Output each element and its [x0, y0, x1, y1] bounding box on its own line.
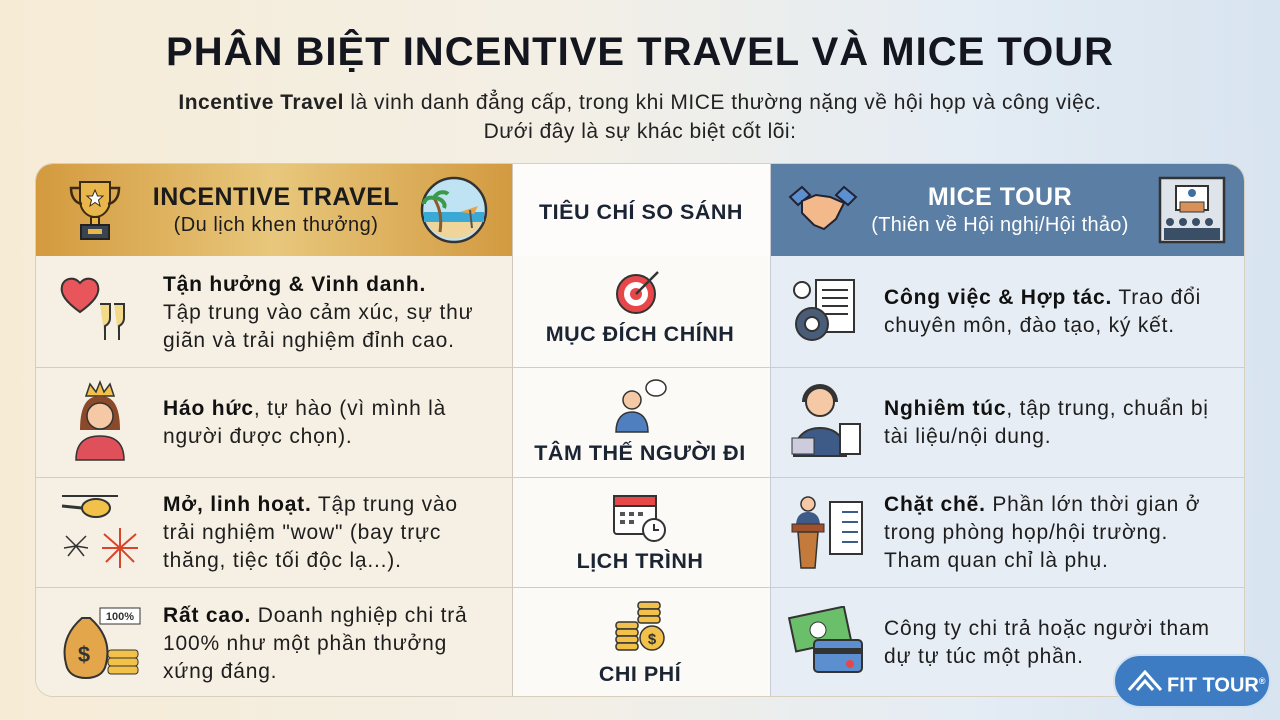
- icon: handshake: [788, 186, 858, 230]
- row 1: purpose: [60, 271, 1201, 352]
- icon: money bag with coins: [64, 608, 140, 679]
- header: mice: (Thiên về Hội nghị/Hội thảo): [871, 214, 1129, 236]
- text: mice mindset: Nghiêm túc, tập trung, chuẩn bị: [884, 397, 1209, 420]
- icon: crowned woman: [75, 380, 125, 461]
- text: mice schedule: [884, 493, 1200, 572]
- text: incentive cost: [163, 604, 468, 683]
- text: mice purpose: Công việc & Hợp tác. Trao đổi: [884, 286, 1201, 309]
- header: criteria: [512, 164, 770, 256]
- icon: heart and glasses: [60, 278, 125, 340]
- text: incentive schedule: Mở, linh hoạt. Tập trung vào: [163, 493, 458, 516]
- icon: coin stacks: [615, 601, 665, 651]
- label: mindset: TÂM THẾ NGƯỜI ĐI: [534, 441, 746, 465]
- text: incentive mindset: người được chọn).: [163, 425, 352, 448]
- icon: money bag with coins: 100%: [106, 611, 134, 623]
- right column bg: [770, 256, 1246, 698]
- label: main purpose: MỤC ĐÍCH CHÍNH: [546, 322, 734, 346]
- icon: conference hall: [1158, 176, 1226, 244]
- header: incentive: (Du lịch khen thưởng): [174, 214, 378, 236]
- icon: helicopter and fireworks: [62, 495, 138, 568]
- text: mice purpose: [884, 286, 1201, 337]
- icon: target: [616, 271, 659, 314]
- icon: person with speech bubble: [615, 379, 667, 433]
- text: mice cost: [884, 617, 1210, 668]
- text: mice schedule: Tham quan chỉ là phụ.: [884, 549, 1109, 572]
- text: mice schedule: trong phòng họp/hội trường.: [884, 521, 1168, 544]
- label: cost: CHI PHÍ: [599, 662, 681, 686]
- header: incentive: [36, 164, 512, 256]
- icon: calendar clock: [613, 495, 666, 542]
- row 2: mindset: [75, 379, 1209, 465]
- text: incentive cost: 100% như một phần thưởng: [163, 632, 447, 655]
- text: incentive mindset: [163, 397, 446, 448]
- icon: cash and card: [788, 606, 863, 673]
- left column bg: [36, 256, 512, 698]
- text: incentive schedule: thăng, tiệc tối độc lạ...).: [163, 549, 402, 572]
- subtitle: [178, 90, 1102, 143]
- header: criteria: TIÊU CHÍ SO SÁNH: [539, 200, 743, 224]
- header: mice: [770, 164, 1246, 256]
- icon: podium and checklist: [792, 496, 863, 569]
- text: mice cost: dự tự túc một phần.: [884, 645, 1084, 668]
- icon: beach: [420, 176, 488, 244]
- row 3: schedule: [62, 493, 1200, 573]
- subtitle: Dưới đây là sự khác biệt cốt lõi:: [484, 120, 796, 143]
- text: incentive schedule: [163, 493, 458, 572]
- text: incentive cost: xứng đáng.: [163, 660, 277, 683]
- text: mice mindset: [884, 397, 1209, 448]
- icon: money bag with coins: $: [78, 642, 90, 667]
- header: mice: MICE TOUR: [928, 183, 1072, 211]
- text: mice schedule: Chặt chẽ. Phần lớn thời gian ở: [884, 493, 1200, 516]
- text: mice mindset: tài liệu/nội dung.: [884, 425, 1051, 448]
- text: incentive purpose: giãn và trải nghiệm đỉnh cao.: [163, 329, 455, 352]
- text: mice cost: Công ty chi trả hoặc người tham: [884, 617, 1210, 640]
- icon: trophy: [70, 181, 120, 240]
- label: schedule: LỊCH TRÌNH: [577, 549, 703, 573]
- logo: fit tour: [1113, 654, 1271, 708]
- text: incentive purpose: Tận hưởng & Vinh danh.: [163, 273, 426, 296]
- icon: coin stacks: $: [648, 631, 657, 648]
- text: incentive mindset: Háo hức, tự hào (vì mình là: [163, 397, 446, 420]
- text: incentive purpose: Tập trung vào cảm xúc, sự thư: [163, 301, 473, 324]
- logo: fit tour: FIT TOUR®: [1167, 675, 1266, 697]
- title: PHÂN BIỆT INCENTIVE TRAVEL VÀ MICE TOUR: [166, 30, 1114, 74]
- subtitle: Incentive Travel là vinh danh đẳng cấp, trong khi MICE thường nặng về hội họp và công việc.: [178, 91, 1102, 114]
- text: mice purpose: chuyên môn, đào tạo, ký kết.: [884, 314, 1175, 337]
- text: incentive cost: Rất cao. Doanh nghiệp chi trả: [163, 604, 468, 627]
- header: incentive: INCENTIVE TRAVEL: [153, 183, 399, 211]
- row 4: cost: [64, 601, 1210, 686]
- comparison table: [35, 163, 1245, 697]
- text: incentive schedule: trải nghiệm "wow" (bay trực: [163, 521, 441, 544]
- icon: gears and document: [793, 279, 855, 341]
- icon: headset person with notes: [792, 384, 861, 457]
- icon: logo mark: [1128, 670, 1162, 691]
- text: incentive purpose: [163, 273, 473, 352]
